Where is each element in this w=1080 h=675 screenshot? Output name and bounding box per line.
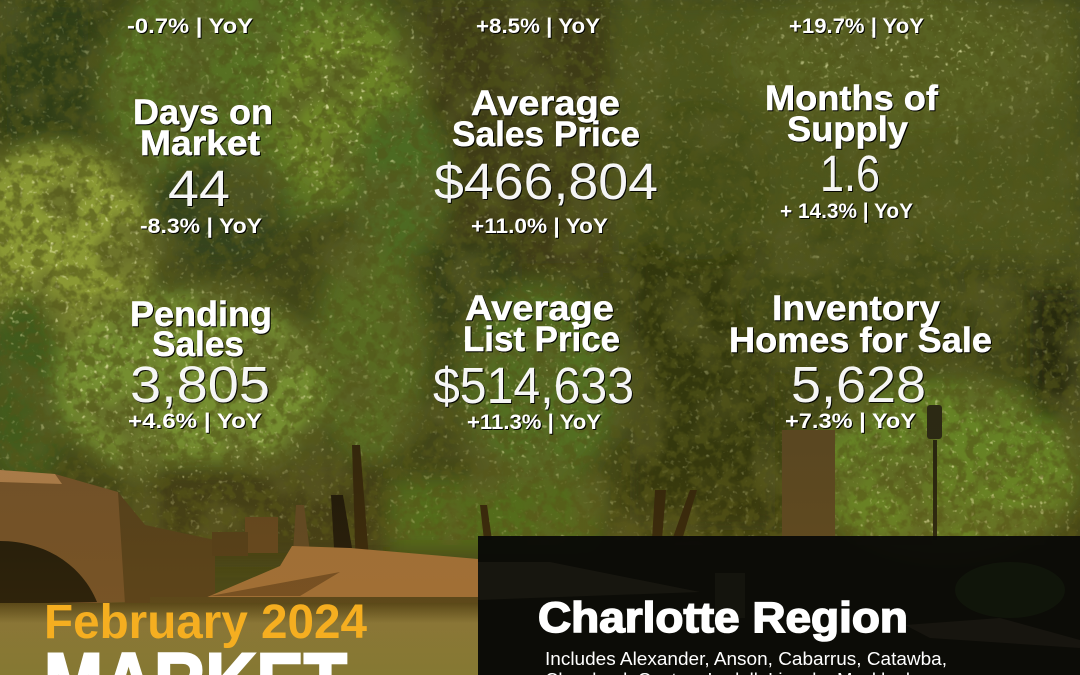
stat: average list price: List Price [463,320,620,359]
stat: average sales price: Sales Price [452,115,640,154]
stat: average list price: +11.3% | YoY [467,411,601,434]
stat: average sales price [434,84,658,238]
foliage highlights [0,0,1080,540]
title date: February 2024 [44,596,367,649]
far bank [150,597,480,617]
stat: clipped top row, middle: +8.5% | YoY [476,15,600,38]
stat: average sales price: +11.0% | YoY [471,215,608,238]
lake water [0,603,480,675]
lamp post [927,405,942,540]
stone bridge [0,470,278,605]
stat: average list price: $514,633 [433,357,634,414]
stat: clipped top row, right: +19.7% | YoY [789,15,924,38]
stat: average sales price: Average [471,84,620,123]
faint shoreline in panel [478,562,1080,648]
stat: pending sales: Pending [130,295,272,334]
stat: days on market: Days on [133,93,273,132]
stat: inventory homes for sale: Inventory [772,289,941,328]
stat: inventory homes for sale: Homes for Sale [729,321,992,360]
stat: average list price [433,289,634,434]
panel: region [478,536,1080,675]
foliage shadows [0,0,1080,540]
panel heading: Charlotte Region: Charlotte Region [538,594,908,642]
stat: months of supply: 1.6 [820,145,880,202]
stat: inventory homes for sale [729,289,992,433]
stat row 1 [127,15,924,38]
stat: pending sales: Sales [152,325,244,364]
stat: average sales price: $466,804 [434,153,658,210]
stat: months of supply: Supply [787,110,909,149]
title block [44,596,367,675]
stat: days on market: 44 [168,160,230,217]
stat: inventory homes for sale: +7.3% | YoY [785,410,916,433]
tree trunks [292,430,835,572]
stat: months of supply [765,79,938,223]
panel description: Includes Alexander, Anson, Cabarrus, Catawba, [545,649,947,669]
stat: clipped top row changes: -0.7% | YoY [127,15,253,38]
stat: days on market: -8.3% | YoY [140,215,262,238]
stat: average list price: Average [465,289,614,328]
stat: days on market: Market [140,124,260,163]
stat: pending sales: +4.6% | YoY [128,410,262,433]
stat: months of supply: Months of [765,79,938,118]
stat: days on market [133,93,273,238]
stat: inventory homes for sale: 5,628 [791,356,926,413]
stat: pending sales [128,295,272,433]
stat: pending sales: 3,805 [130,356,270,413]
gravel path [205,546,478,600]
stat: months of supply: + 14.3% | YoY [780,200,913,223]
